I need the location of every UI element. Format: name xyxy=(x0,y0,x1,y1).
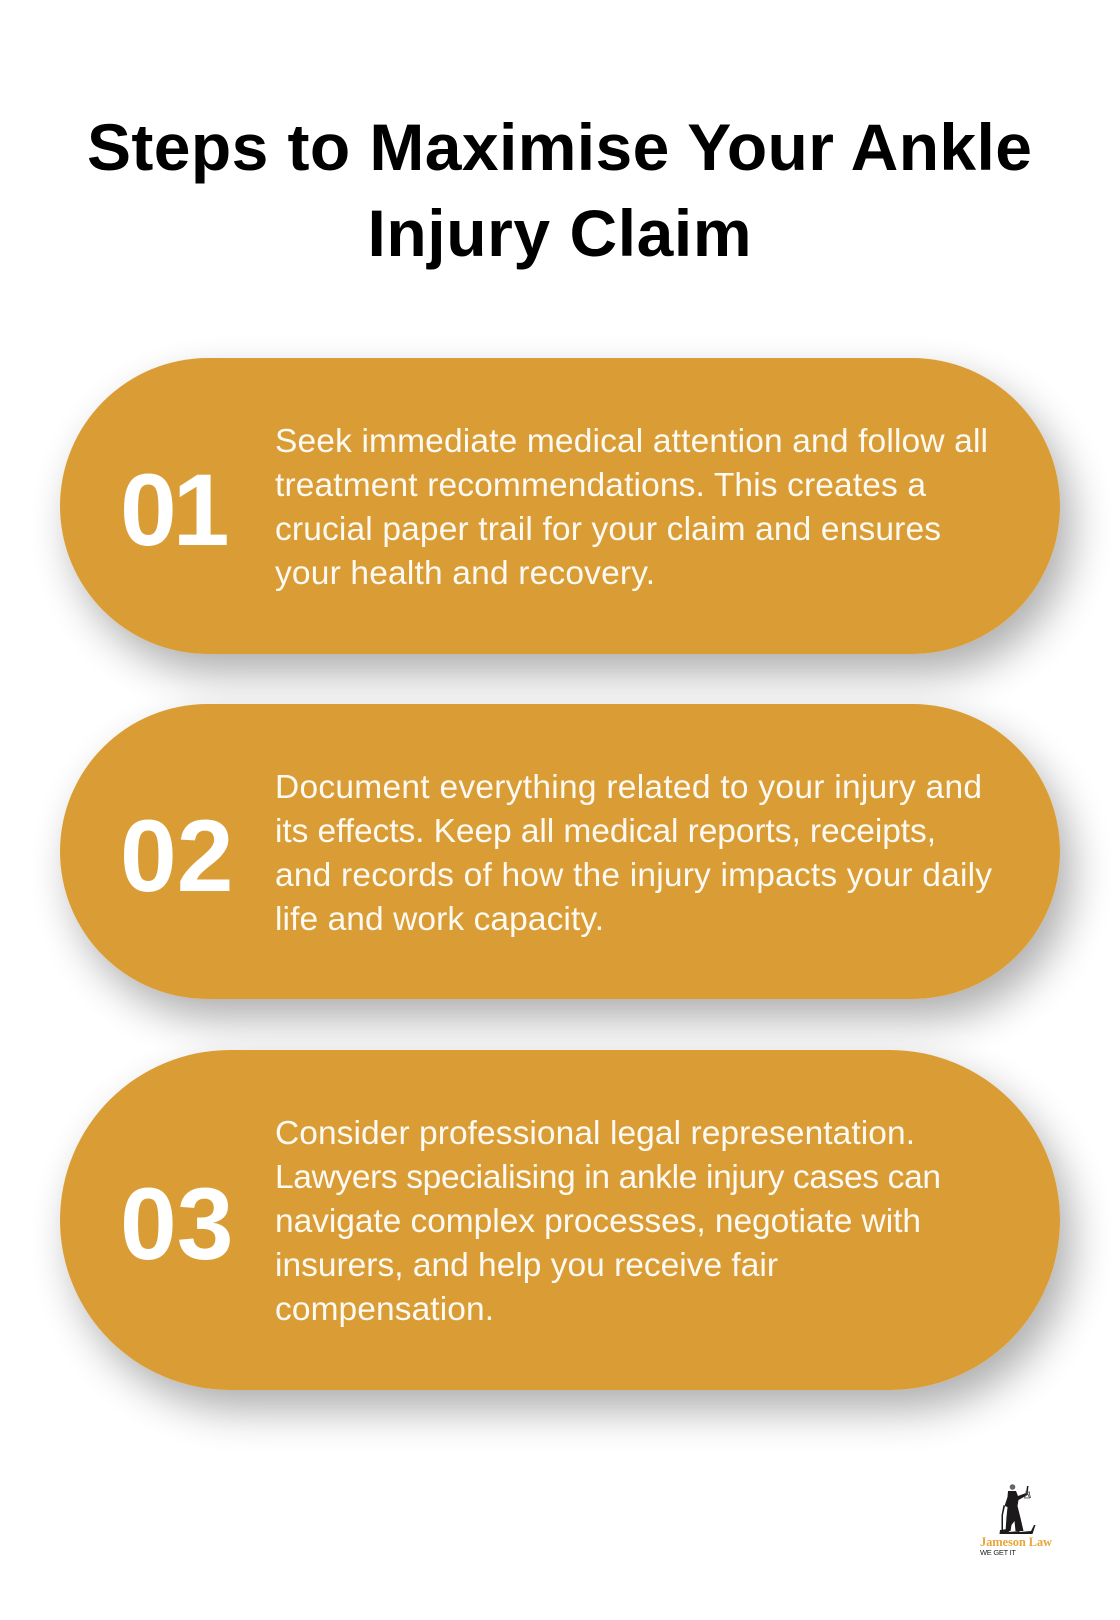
step 02 text: life and work capacity. xyxy=(275,901,604,938)
step number 01: 01 xyxy=(120,453,227,567)
step 03 text: navigate complex processes, negotiate with xyxy=(275,1203,921,1240)
step 02 text: and records of how the injury impacts your daily xyxy=(275,857,992,894)
step 03 text xyxy=(275,1115,941,1328)
title xyxy=(87,110,1032,270)
step 03 text: Lawyers specialising in ankle injury cases can xyxy=(275,1159,941,1196)
step 01 text: Seek immediate medical attention and follow all xyxy=(275,423,988,460)
panel: step 01 xyxy=(60,358,1060,654)
step 01 text: crucial paper trail for your claim and ensures xyxy=(275,511,941,548)
step 03 text: compensation. xyxy=(275,1291,494,1328)
logo tagline: WE GET IT xyxy=(980,1548,1016,1557)
step 02 text: its effects. Keep all medical reports, receipts, xyxy=(275,813,936,850)
panel: step 02 xyxy=(60,704,1060,999)
title: Injury Claim xyxy=(368,196,752,270)
icon: lady justice xyxy=(1000,1484,1036,1534)
step 01 text: your health and recovery. xyxy=(275,555,655,592)
step number 02: 02 xyxy=(120,799,233,913)
step 03 text: Consider professional legal representation. xyxy=(275,1115,915,1152)
step 01 text: treatment recommendations. This creates a xyxy=(275,467,926,504)
title: Steps to Maximise Your Ankle xyxy=(87,110,1032,184)
logo: Jameson Law xyxy=(980,1484,1052,1557)
step 02 text: Document everything related to your injury and xyxy=(275,769,982,806)
panel: step 03 xyxy=(60,1050,1060,1390)
step number 03: 03 xyxy=(120,1167,233,1281)
logo wordmark: Jameson Law xyxy=(980,1535,1052,1549)
step 02 text xyxy=(275,769,992,938)
step 03 text: insurers, and help you receive fair xyxy=(275,1247,778,1284)
step 01 text xyxy=(275,423,988,592)
